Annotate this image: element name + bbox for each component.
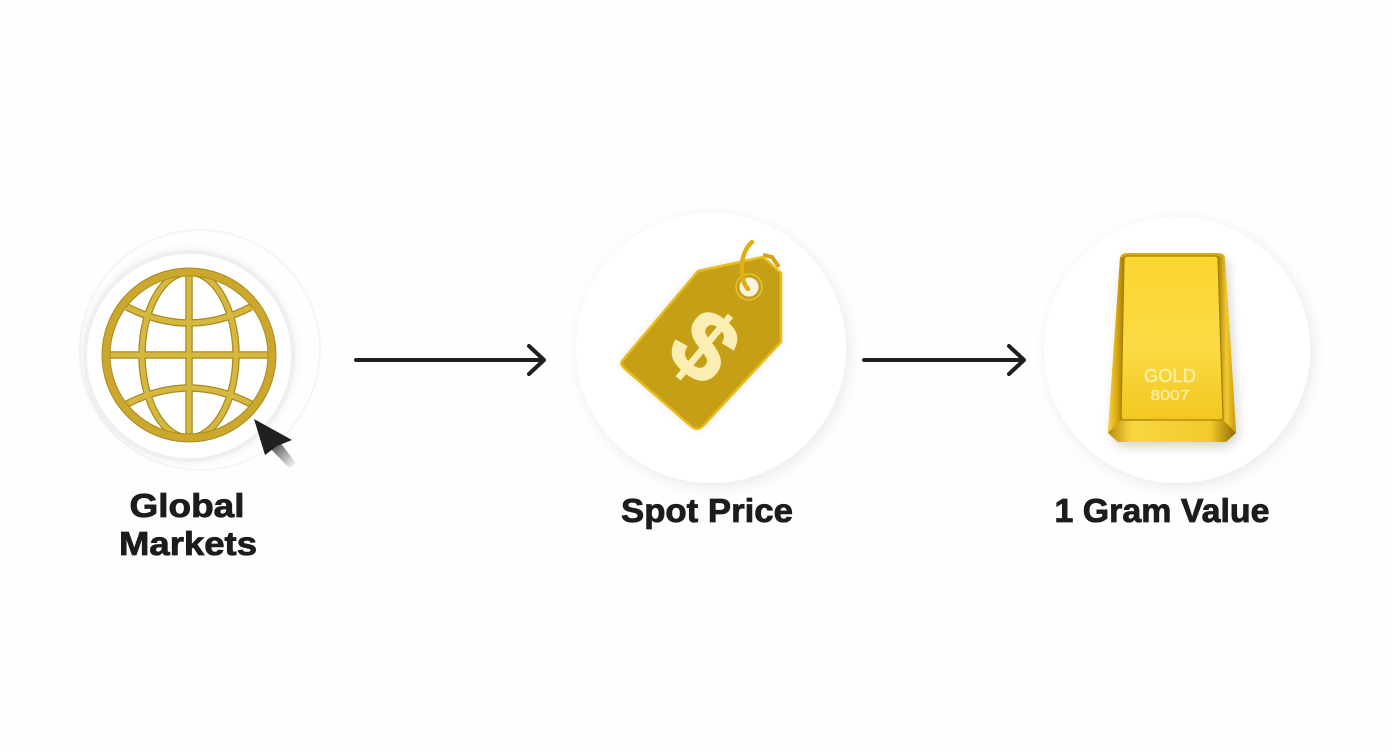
label: Global Markets: Global	[130, 487, 244, 524]
icon: gold bar	[1108, 253, 1236, 442]
panel: gram value	[1044, 217, 1310, 483]
icon: gold bar: 8007	[1150, 387, 1190, 404]
inner disc	[85, 252, 293, 460]
disc	[576, 213, 846, 483]
outer disc	[80, 230, 320, 470]
panel: global markets	[80, 230, 320, 470]
label: 1 Gram Value: 1 Gram Value	[1054, 492, 1270, 529]
icon: price tag	[621, 242, 781, 429]
icon: cursor arrow	[254, 419, 296, 468]
disc	[1044, 217, 1310, 483]
arrow: markets to spot price	[356, 346, 544, 374]
label: Spot Price: Spot Price	[621, 492, 793, 529]
dollar sign: $	[649, 286, 761, 406]
label: Global Markets: Markets	[119, 525, 257, 562]
icon: gold globe	[106, 272, 272, 438]
bar stamp: GOLD	[1144, 366, 1196, 386]
panel: spot price	[576, 213, 846, 483]
arrow: spot price to gram value	[864, 346, 1024, 374]
label: Global Markets	[119, 487, 257, 562]
